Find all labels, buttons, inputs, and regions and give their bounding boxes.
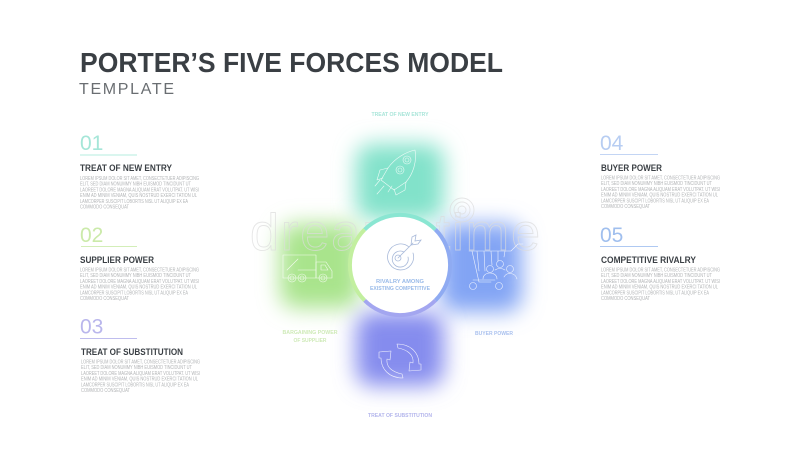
ring arc: periwinkle <box>365 300 435 315</box>
panel: 02 supplier power: SUPPLIER POWER <box>80 255 154 265</box>
panel: 05 competitive rivalry: LOREM IPSUM DOLOR SIT AMET, CONSECTETUER ADIPISCING <box>601 268 720 274</box>
panel: 02 supplier power: LAMCORPER SUSCIPIT LOBORTIS NISL UT ALIQUIP EX EA <box>80 290 189 296</box>
label: bargaining power of supplier: OF SUPPLIER <box>294 338 326 344</box>
title: PORTER’S FIVE FORCES MODEL <box>80 47 503 78</box>
icon: shopping cart with people <box>469 244 523 290</box>
panel: 03 treat of substitution <box>80 316 200 394</box>
panel: 01 treat of new entry: LAMCORPER SUSCIPIT LOBORTIS NISL UT ALIQUIP EX EA <box>80 199 189 205</box>
panel: 03 treat of substitution: LAMCORPER SUSCIPIT LOBORTIS NISL UT ALIQUIP EX EA <box>81 382 190 388</box>
panel: 05 competitive rivalry: COMPETITIVE RIVALRY <box>601 255 696 265</box>
panel: 04 buyer power: LOREM IPSUM DOLOR SIT AMET, CONSECTETUER ADIPISCING <box>601 176 720 182</box>
panel: 01 treat of new entry: TREAT OF NEW ENTRY <box>80 163 172 173</box>
panel: 03 treat of substitution: 03 <box>80 316 103 338</box>
panel: 05 competitive rivalry: LAMCORPER SUSCIPIT LOBORTIS NISL UT ALIQUIP EX EA <box>601 290 710 296</box>
ring arc: teal <box>365 215 435 230</box>
panel: 01 treat of new entry: LAOREET DOLORE MAGNA ALIQUAM ERAT VOLUTPAT. UT WISI <box>80 187 199 193</box>
label: treat of substitution: TREAT OF SUBSTITUTION <box>368 413 432 419</box>
panel: 05 competitive rivalry <box>600 224 720 302</box>
panel: 04 buyer power: COMMODO CONSEQUAT <box>601 204 650 210</box>
panel: 04 buyer power: ELIT, SED DIAM NONUMMY NIBH EUISMOD TINCIDUNT UT <box>601 181 712 187</box>
panel: 03 treat of substitution: ENIM AD MINIM VENIAM, QUIS NOSTRUD EXERCI TATION UL <box>81 377 198 383</box>
blurred square: green <box>280 224 360 308</box>
blurred square: periwinkle <box>356 312 444 386</box>
panel: 02 supplier power <box>80 224 199 302</box>
panel: 03 treat of substitution: LAOREET DOLORE MAGNA ALIQUAM ERAT VOLUTPAT. UT WISI <box>81 371 200 377</box>
panel: 03 treat of substitution: COMMODO CONSEQUAT <box>81 388 130 394</box>
panel: 05 competitive rivalry: ELIT, SED DIAM NONUMMY NIBH EUISMOD TINCIDUNT UT <box>601 273 712 279</box>
center circle: EXISTING COMPETITIVE <box>370 286 430 292</box>
panel: 04 buyer power: 04 <box>600 132 624 155</box>
panel: 01 treat of new entry: ENIM AD MINIM VENIAM, QUIS NOSTRUD EXERCI TATION UL <box>80 193 197 199</box>
panel: 01 treat of new entry <box>80 132 199 210</box>
panel: 01 treat of new entry: COMMODO CONSEQUAT <box>80 204 129 210</box>
blurred square: blue <box>440 224 522 312</box>
center circle <box>350 215 450 315</box>
panel: 02 supplier power: ENIM AD MINIM VENIAM, QUIS NOSTRUD EXERCI TATION UL <box>80 285 197 291</box>
label: buyer power: BUYER POWER <box>475 331 513 337</box>
panel: 01 treat of new entry: LOREM IPSUM DOLOR SIT AMET, CONSECTETUER ADIPISCING <box>80 176 199 182</box>
panel: 05 competitive rivalry: COMMODO CONSEQUAT <box>601 296 650 302</box>
panel: 02 supplier power: LAOREET DOLORE MAGNA ALIQUAM ERAT VOLUTPAT. UT WISI <box>80 279 199 285</box>
panel: 03 treat of substitution: LOREM IPSUM DOLOR SIT AMET, CONSECTETUER ADIPISCING <box>81 360 200 366</box>
subtitle: TEMPLATE <box>79 81 174 98</box>
panel: 05 competitive rivalry: 05 <box>600 224 623 247</box>
ring arc: green <box>350 230 365 300</box>
panel: 02 supplier power: ELIT, SED DIAM NONUMMY NIBH EUISMOD TINCIDUNT UT <box>80 273 191 279</box>
panel: 04 buyer power <box>600 132 720 210</box>
center label: RIVALRY AMONG <box>376 279 424 285</box>
panel: 04 buyer power: ENIM AD MINIM VENIAM, QUIS NOSTRUD EXERCI TATION UL <box>601 193 718 199</box>
ring arc: blue <box>435 230 450 300</box>
panel: 04 buyer power: BUYER POWER <box>601 163 662 173</box>
panel: 05 competitive rivalry: ENIM AD MINIM VENIAM, QUIS NOSTRUD EXERCI TATION UL <box>601 285 718 291</box>
label: bargaining power of supplier <box>282 330 338 344</box>
panel: 02 supplier power: 02 <box>80 224 103 247</box>
panel: 03 treat of substitution: TREAT OF SUBSTITUTION <box>81 347 183 357</box>
panel: 02 supplier power: LOREM IPSUM DOLOR SIT AMET, CONSECTETUER ADIPISCING <box>80 268 199 274</box>
label: bargaining power of supplier: BARGAINING POWER <box>282 330 338 336</box>
icon: rocket <box>375 150 416 195</box>
panel: 05 competitive rivalry: LAOREET DOLORE MAGNA ALIQUAM ERAT VOLUTPAT. UT WISI <box>601 279 720 285</box>
panel: 01 treat of new entry: 01 <box>80 132 103 155</box>
icon: recycle arrows <box>379 344 421 378</box>
icon: target with arrow <box>388 235 421 270</box>
watermark: dreamstime <box>250 204 540 262</box>
label: treat of new entry: TREAT OF NEW ENTRY <box>372 112 429 118</box>
panel: 02 supplier power: COMMODO CONSEQUAT <box>80 296 129 302</box>
icon: truck <box>283 255 332 282</box>
panel: 01 treat of new entry: ELIT, SED DIAM NONUMMY NIBH EUISMOD TINCIDUNT UT <box>80 182 191 188</box>
blurred square: teal <box>356 144 444 220</box>
panel: 04 buyer power: LAMCORPER SUSCIPIT LOBORTIS NISL UT ALIQUIP EX EA <box>601 198 710 204</box>
panel: 03 treat of substitution: ELIT, SED DIAM NONUMMY NIBH EUISMOD TINCIDUNT UT <box>81 365 192 371</box>
panel: 04 buyer power: LAOREET DOLORE MAGNA ALIQUAM ERAT VOLUTPAT. UT WISI <box>601 187 720 193</box>
